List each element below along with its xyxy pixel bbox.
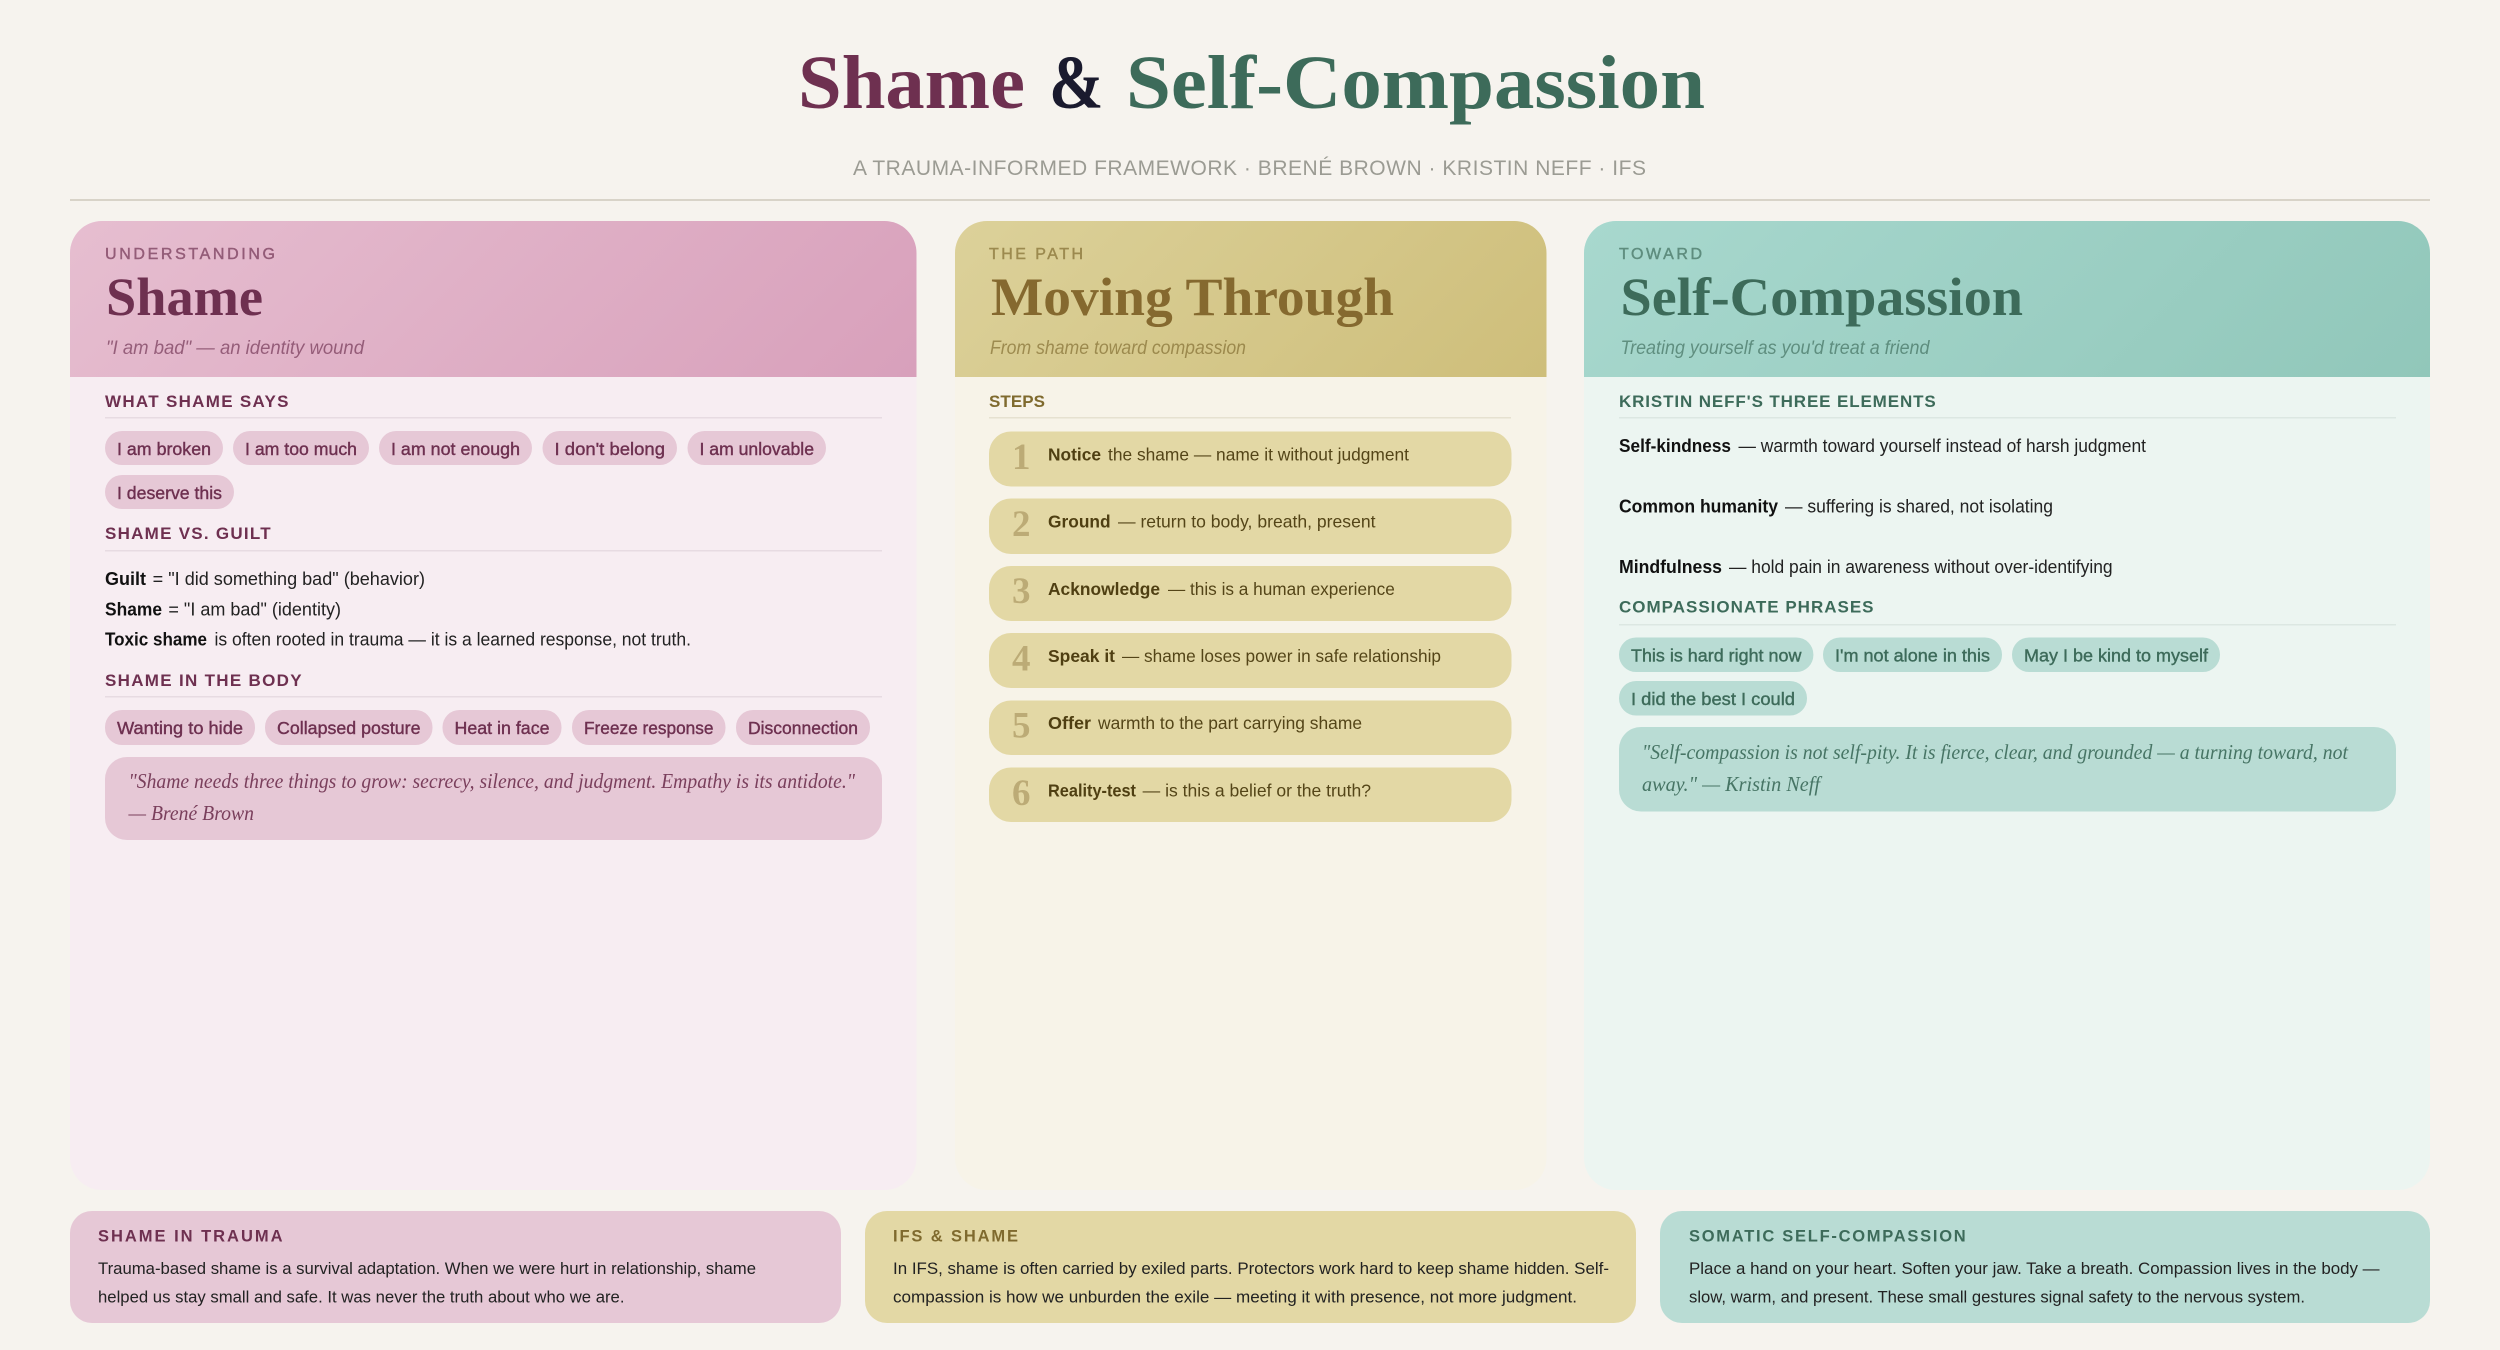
text: three elements: Common humanity [1619,496,1778,516]
chips: shame in the body: Heat in face [454,718,550,738]
step 6 [989,768,1512,822]
step 6: — is this a belief or the truth? [1143,780,1371,800]
step 3 [989,566,1512,621]
step 5: Offer [1048,713,1091,733]
self-compassion header: Self-Compassion [1620,267,2023,327]
quote: brene brown: — Brené Brown [128,801,254,825]
callout: shame in trauma: SHAME IN TRAUMA [98,1228,283,1246]
heading: shame in the body: SHAME IN THE BODY [105,671,302,690]
step 1: the shame — name it without judgment [1108,444,1409,464]
text: three elements: — suffering is shared, not isolating [1785,496,2053,516]
step 6: Reality-test [1048,780,1136,800]
chips: shame in the body: Wanting to hide [117,718,243,738]
text: shame vs guilt: Shame [105,600,162,620]
title: Shame [798,41,1025,125]
callout: shame in trauma: Trauma-based shame is a survival adaptation. When we were hurt in relationship, shame [98,1259,756,1278]
chips: what shame says: I am too much [245,439,357,459]
step 1 [989,432,1512,486]
chips: what shame says: I am broken [117,439,211,459]
step 3: — this is a human experience [1168,579,1395,599]
callout: shame in trauma [70,1211,841,1323]
quote: kristin neff: away." — Kristin Neff [1642,772,1823,796]
shame header [70,221,916,377]
chips: what shame says: I don't belong [554,439,665,459]
self-compassion header: Treating yourself as you'd treat a friend [1620,338,1931,359]
text: shame vs guilt: = "I am bad" (identity) [168,600,341,620]
text: three elements: Mindfulness [1619,557,1722,577]
callout: somatic self-compassion: Place a hand on your heart. Soften your jaw. Take a breath. Compassion lives in the body — [1689,1259,2380,1278]
chips: compassionate phrases: May I be kind to myself [2024,646,2208,666]
step 3: 3 [1012,571,1030,612]
moving through header: Moving Through [991,267,1394,327]
panel: moving through [955,221,1546,1190]
callout: ifs and shame: IFS & SHAME [893,1228,1018,1246]
step 4: Speak it [1048,646,1115,666]
panel: shame [70,221,916,1190]
self-compassion header: TOWARD [1619,246,1702,263]
quote: kristin neff: "Self-compassion is not self-pity. It is fierce, clear, and grounded — a turning toward, not [1642,740,2349,764]
heading: what shame says: WHAT SHAME SAYS [105,392,288,411]
moving through header: THE PATH [989,246,1083,263]
chips: what shame says: I am unlovable [700,439,814,459]
callout: somatic self-compassion [1660,1211,2430,1323]
title: Self-Compassion [1126,41,1705,125]
chips: compassionate phrases: I did the best I could [1631,689,1795,709]
self-compassion header [1584,221,2430,377]
step 4: 4 [1012,638,1030,680]
callout: somatic self-compassion: slow, warm, and present. These small gestures signal safety to the nervous system. [1689,1288,2305,1306]
text: shame vs guilt: Toxic shame [105,630,207,650]
text: three elements [1619,436,2146,577]
step 2: 2 [1012,504,1030,545]
shame header: UNDERSTANDING [105,246,275,263]
title [798,41,1705,125]
heading: compassionate phrases: COMPASSIONATE PHRASES [1619,598,1874,616]
quote: brene brown [105,757,882,840]
step 4: — shame loses power in safe relationship [1122,646,1441,666]
title: & [1049,41,1104,125]
step 5: warmth to the part carrying shame [1097,713,1362,733]
shame header: "I am bad" — an identity wound [106,338,365,359]
step 4 [989,633,1512,688]
moving through header: From shame toward compassion [990,338,1246,359]
step 1: Notice [1048,444,1101,464]
heading: three elements: KRISTIN NEFF'S THREE ELEMENTS [1619,392,1936,411]
callout: ifs and shame: In IFS, shame is often carried by exiled parts. Protectors work hard to keep shame hidden. Self- [893,1259,1609,1278]
chips: shame in the body [105,710,870,745]
moving through header [955,221,1546,377]
text: three elements: Self-kindness [1619,436,1731,456]
shame header: Shame [106,267,263,327]
step 5 [989,700,1512,755]
panel: self-compassion [1584,221,2430,1190]
heading: steps: STEPS [989,392,1045,411]
text: shame vs guilt: Guilt [105,569,146,589]
chips: what shame says: I am not enough [391,439,520,459]
text: shame vs guilt: = "I did something bad" (behavior) [153,569,425,589]
chips: compassionate phrases [1619,638,2220,716]
chips: shame in the body: Collapsed posture [277,718,420,738]
text: three elements: — warmth toward yourself instead of harsh judgment [1738,436,2146,456]
chips: compassionate phrases: I'm not alone in this [1835,646,1990,666]
step 1: 1 [1012,437,1030,478]
chips: shame in the body: Disconnection [748,718,858,738]
step 2: — return to body, breath, present [1118,512,1376,532]
chips: shame in the body: Freeze response [584,718,714,738]
quote: kristin neff [1619,727,2396,812]
heading: shame vs guilt: SHAME VS. GUILT [105,524,271,543]
callout: shame in trauma: helped us stay small and safe. It was never the truth about who we are. [98,1288,624,1306]
chips: what shame says [105,431,826,509]
callout: ifs and shame [865,1211,1636,1323]
callout: somatic self-compassion: SOMATIC SELF-COMPASSION [1689,1228,1966,1246]
chips: compassionate phrases: This is hard right now [1631,646,1802,666]
step 2 [989,498,1512,554]
text: shame vs guilt [105,569,691,650]
text: shame vs guilt: is often rooted in trauma — it is a learned response, not truth. [214,630,691,650]
step 2: Ground [1048,512,1111,532]
text: three elements: — hold pain in awareness without over-identifying [1729,557,2113,577]
callout: ifs and shame: compassion is how we unburden the exile — meeting it with presence, not more judgment. [893,1288,1577,1306]
step 3: Acknowledge [1048,579,1160,599]
quote: brene brown: "Shame needs three things to grow: secrecy, silence, and judgment. Empathy is its antidote." [128,769,855,793]
subtitle: A TRAUMA-INFORMED FRAMEWORK · BRENÉ BROWN · KRISTIN NEFF · IFS [853,157,1646,180]
chips: what shame says: I deserve this [117,483,222,503]
step 6: 6 [1012,773,1030,814]
step 5: 5 [1012,706,1030,746]
